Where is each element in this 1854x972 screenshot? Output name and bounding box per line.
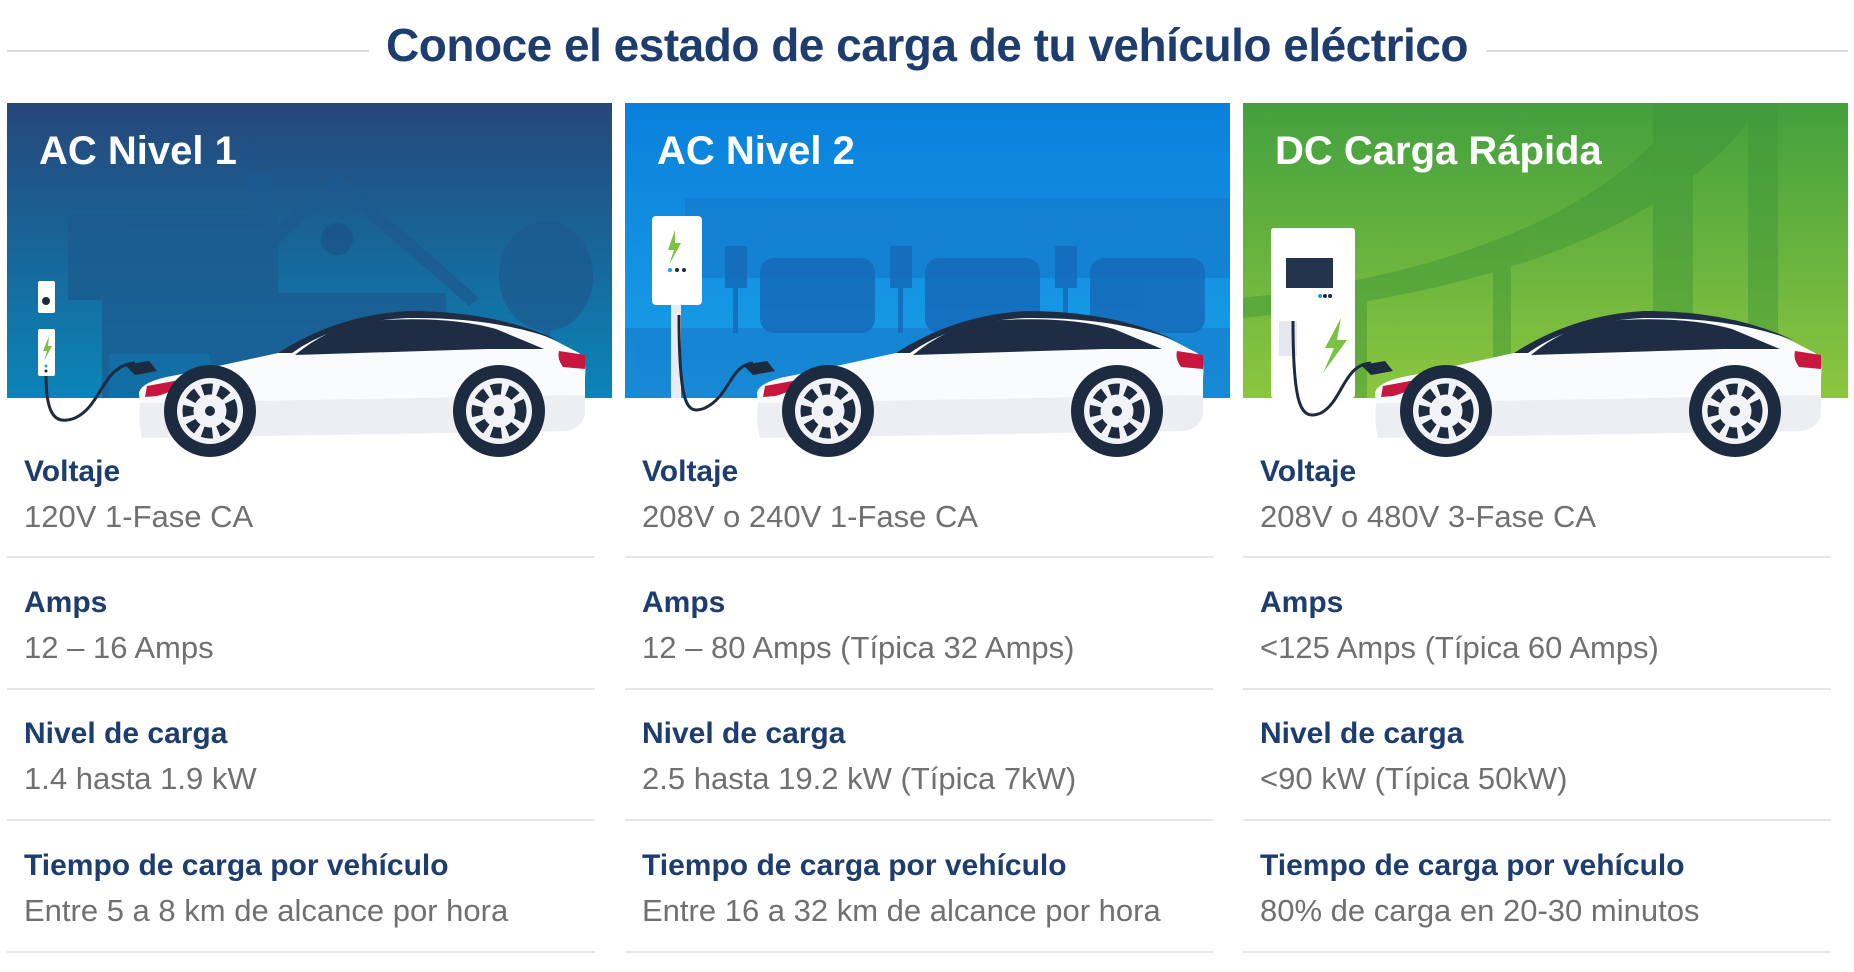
row: Voltaje: 208V o 480V 3-Fase CA [1260, 499, 1596, 534]
row: Nivel de carga: <90 kW (Típica 50kW) [1260, 761, 1568, 796]
icon: DC charging station [1271, 228, 1822, 457]
row: Tiempo [7, 821, 595, 953]
row: Nivel de carga [7, 690, 595, 821]
title: DC Carga Rápida: DC Carga Rápida [1275, 129, 1602, 173]
row: Amps: Amps [1260, 586, 1343, 619]
icon: wall charger [652, 216, 1204, 457]
row: Voltaje: Voltaje [1260, 455, 1356, 488]
row: Amps [625, 558, 1213, 690]
title: AC Nivel 2: AC Nivel 2 [657, 129, 855, 173]
row: Amps: 12 – 16 Amps [24, 630, 214, 665]
row: Tiempo: 80% de carga en 20-30 minutos [1260, 893, 1699, 928]
row: Voltaje [625, 455, 1213, 558]
image: home charging [7, 103, 612, 398]
row: Voltaje: Voltaje [642, 455, 738, 488]
row: Voltaje: 120V 1-Fase CA [24, 499, 253, 534]
row: Amps: <125 Amps (Típica 60 Amps) [1260, 630, 1659, 665]
row: Nivel de carga [1243, 690, 1831, 821]
image: highway fast charging [1243, 103, 1848, 398]
image: parking charging [625, 103, 1230, 398]
title: Conoce el estado de carga de tu vehículo eléctrico [386, 19, 1468, 71]
row: Amps: 12 – 80 Amps (Típica 32 Amps) [642, 630, 1074, 665]
row: Nivel de carga [625, 690, 1213, 821]
panel: AC Nivel 1 [7, 103, 612, 953]
row: Tiempo: Tiempo de carga por vehículo [642, 849, 1067, 882]
row: Nivel de carga: 1.4 hasta 1.9 kW [24, 761, 257, 796]
row: Tiempo: Entre 5 a 8 km de alcance por hora [24, 893, 508, 928]
row: Tiempo [1243, 821, 1831, 953]
row: Amps: Amps [24, 586, 107, 619]
row: Voltaje [7, 455, 595, 558]
icon: wall outlet and charger [38, 281, 586, 457]
row: Amps: Amps [642, 586, 725, 619]
row: Nivel de carga: 2.5 hasta 19.2 kW (Típica 7kW) [642, 761, 1076, 796]
row: Voltaje: 208V o 240V 1-Fase CA [642, 499, 978, 534]
row: Tiempo [625, 821, 1213, 953]
panel: AC Nivel 2 [625, 103, 1230, 953]
row: Tiempo: Tiempo de carga por vehículo [1260, 849, 1685, 882]
row: Voltaje: Voltaje [24, 455, 120, 488]
row: Tiempo: Tiempo de carga por vehículo [24, 849, 449, 882]
row: Tiempo: Entre 16 a 32 km de alcance por hora [642, 893, 1161, 928]
panel: DC Carga Rápida [1243, 103, 1848, 953]
row: Voltaje [1243, 455, 1831, 558]
row: Nivel de carga: Nivel de carga [1260, 717, 1463, 750]
row: Nivel de carga: Nivel de carga [642, 717, 845, 750]
row: Nivel de carga: Nivel de carga [24, 717, 227, 750]
title: AC Nivel 1: AC Nivel 1 [39, 129, 237, 173]
row: Amps [7, 558, 595, 690]
row: Amps [1243, 558, 1831, 690]
